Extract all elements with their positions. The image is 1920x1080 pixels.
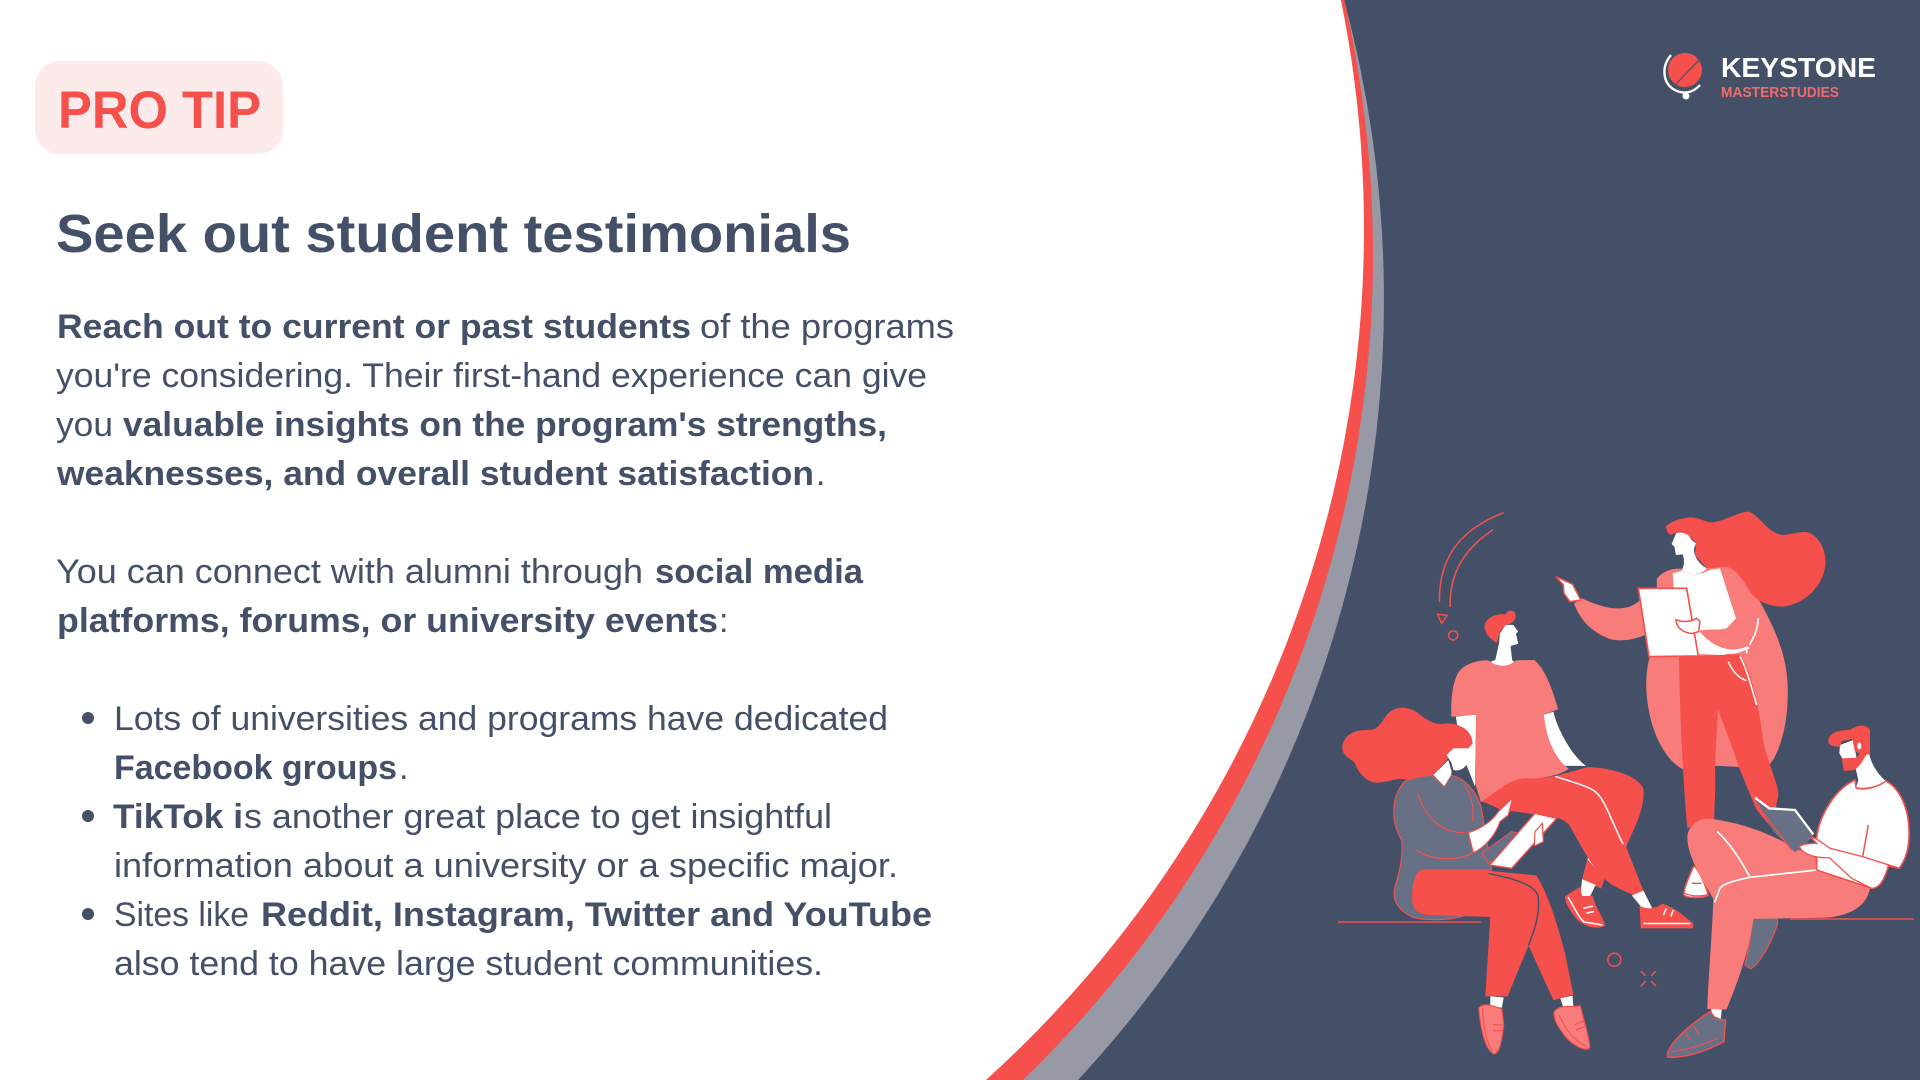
bullet list bbox=[82, 700, 932, 983]
text block: intro paragraph: you're considering. Their first-hand experience can give bbox=[56, 357, 927, 395]
bullet: facebook groups: . bbox=[399, 749, 408, 787]
badge: pro tip: PRO TIP bbox=[58, 81, 261, 140]
bullet: tiktok: TikTok i bbox=[113, 798, 243, 836]
bullet: tiktok: information about a university or a specific major. bbox=[114, 847, 898, 885]
title: Seek out student testimonials bbox=[56, 204, 851, 264]
bullet: facebook groups bbox=[82, 700, 888, 787]
figure: seated woman on left bbox=[1338, 708, 1590, 1054]
decorative doodles bbox=[1437, 513, 1656, 986]
bullet: other sites: Reddit, Instagram, Twitter and YouTube bbox=[261, 896, 932, 934]
text block: alumni paragraph: social media bbox=[655, 553, 864, 591]
logo: keystone masterstudies bbox=[1664, 52, 1876, 101]
figure: seated man in centre bbox=[1451, 611, 1693, 928]
text block: intro paragraph: you bbox=[56, 406, 113, 444]
text block: intro paragraph bbox=[56, 308, 954, 493]
bullet: other sites: Sites like bbox=[114, 896, 249, 934]
text block: alumni paragraph: You can connect with alumni through bbox=[56, 553, 643, 591]
text block: intro paragraph: Reach out to current or past students bbox=[57, 308, 691, 346]
logo: keystone masterstudies: MASTERSTUDIES bbox=[1721, 85, 1839, 101]
text block: alumni paragraph bbox=[56, 553, 864, 640]
figure: seated man on right bbox=[1667, 726, 1914, 1057]
figure: standing woman bbox=[1556, 512, 1825, 828]
text block: intro paragraph: weaknesses, and overall student satisfaction bbox=[56, 455, 814, 493]
bullet: facebook groups: Lots of universities and programs have dedicated bbox=[114, 700, 888, 738]
text block: intro paragraph: valuable insights on the program's strengths, bbox=[123, 406, 887, 444]
bullet: tiktok bbox=[82, 798, 898, 885]
text block: intro paragraph: of the programs bbox=[700, 308, 954, 346]
text block: alumni paragraph: platforms, forums, or university events bbox=[57, 602, 718, 640]
badge: pro tip bbox=[35, 61, 283, 154]
bullet: other sites bbox=[82, 896, 932, 983]
bullet: facebook groups: Facebook groups bbox=[114, 749, 397, 787]
illustration: students talking bbox=[1338, 512, 1914, 1057]
text block: alumni paragraph: : bbox=[719, 602, 728, 640]
text block: intro paragraph: . bbox=[816, 455, 825, 493]
bullet: other sites: also tend to have large student communities. bbox=[114, 945, 823, 983]
logo: keystone masterstudies: KEYSTONE bbox=[1721, 52, 1876, 83]
bullet: tiktok: s another great place to get insightful bbox=[244, 798, 832, 836]
icon: globe bbox=[1664, 53, 1702, 100]
